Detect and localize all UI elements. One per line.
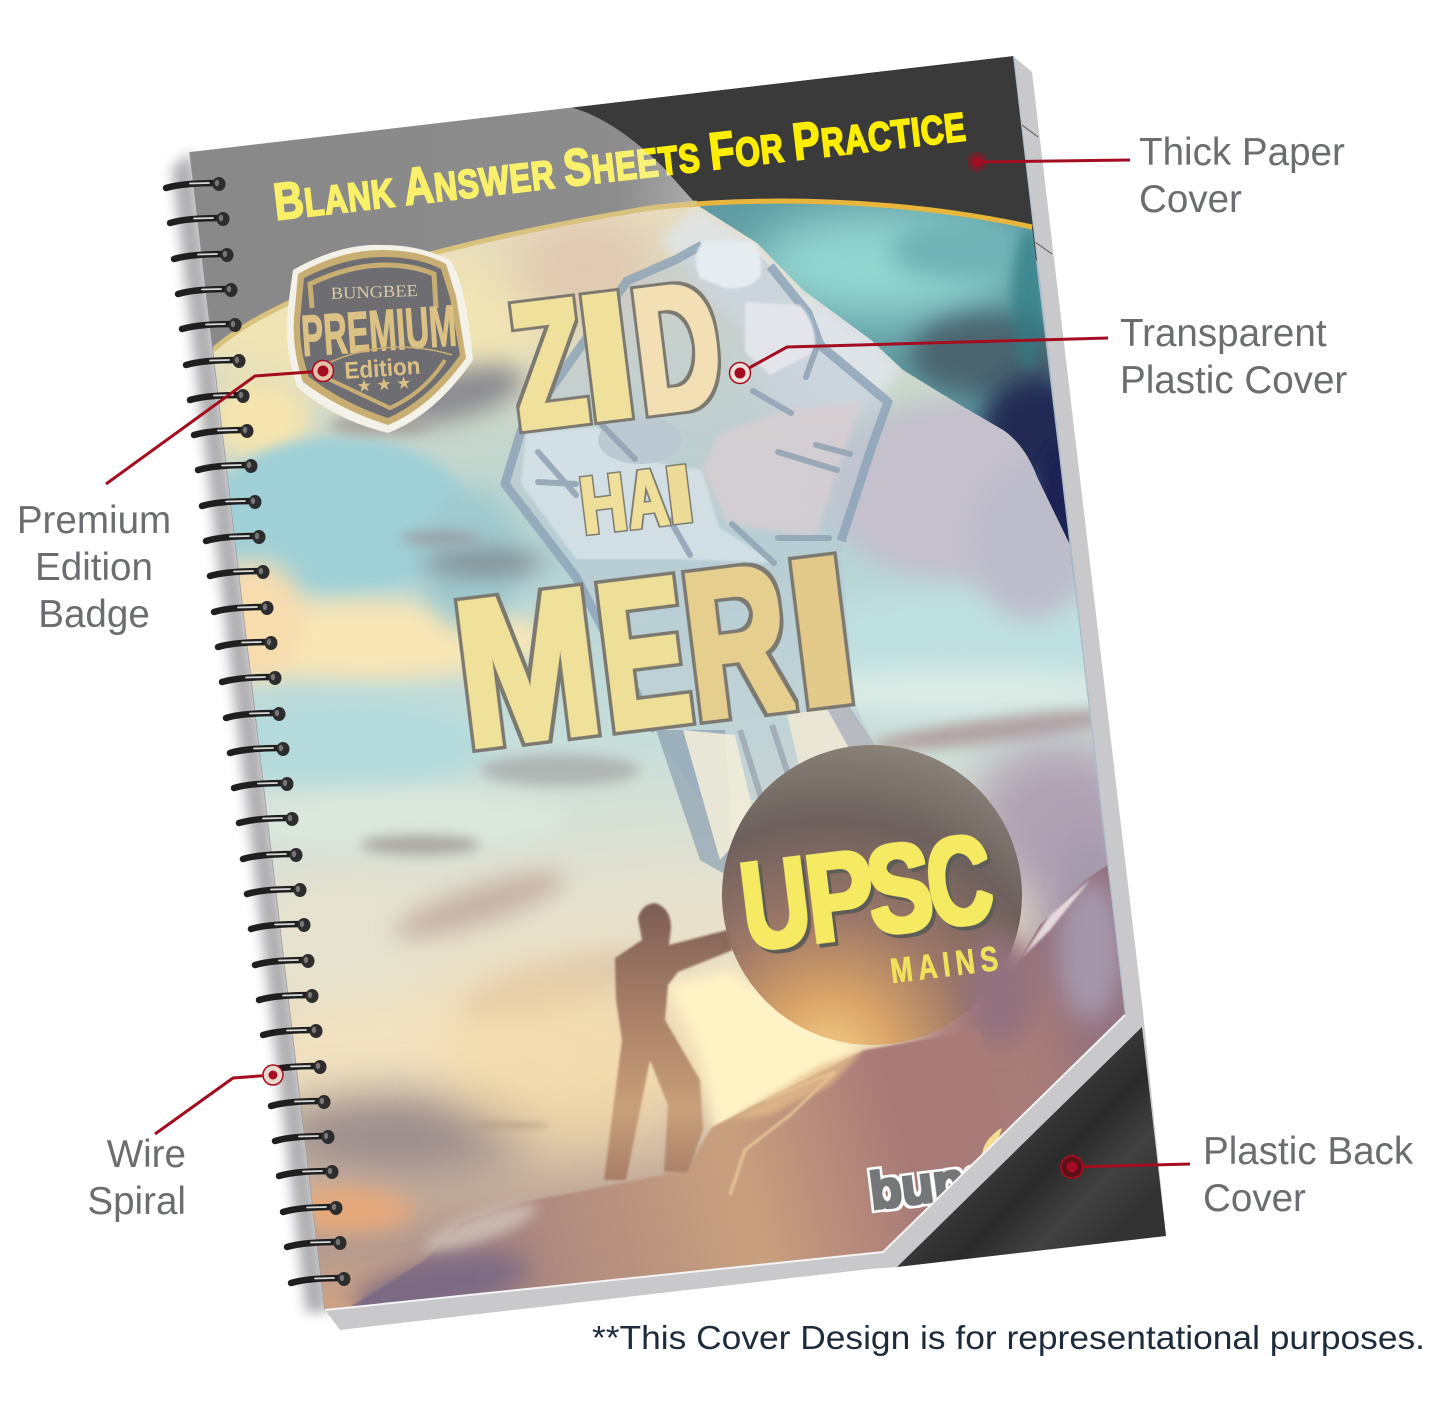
premium edition badge [287, 245, 473, 433]
headline: ZID: Z [501, 260, 595, 466]
badge word PREMIUM: PREMIUM [299, 293, 459, 369]
callout: plastic back cover: Cover [1203, 1177, 1306, 1220]
headline: UPSC: U [733, 832, 818, 977]
front cover [160, 56, 1155, 1330]
footnote: **This Cover Design is for representational purposes. [592, 1319, 1425, 1356]
callout: thick paper cover: Thick Paper [1139, 131, 1345, 174]
headline: HAI [575, 449, 700, 552]
callout: thick paper cover: Cover [1139, 178, 1242, 221]
headline: UPSC: S [860, 817, 940, 962]
headline: HAI: I [659, 449, 700, 542]
callout: wire spiral: Wire [107, 1133, 186, 1176]
plastic back cover [897, 1027, 1166, 1267]
callout: wire spiral [87, 1065, 283, 1223]
callout: thick paper cover [967, 131, 1345, 221]
callout: transparent plastic cover [730, 312, 1347, 402]
callout: wire spiral: Spiral [87, 1180, 186, 1223]
callout: premium edition badge [17, 360, 334, 636]
callout: plastic back cover [1061, 1130, 1414, 1220]
headline: ZID: I [566, 254, 648, 459]
title strip text: BLANK ANSWER SHEETS FOR PRACTICE [271, 94, 969, 232]
cover artwork: teal and navy corner [699, 204, 1075, 590]
cover artwork: sky [213, 206, 1125, 1309]
callout: premium edition badge: Badge [38, 593, 150, 636]
cover artwork: logo: bungbee [866, 1137, 1089, 1221]
callout: transparent plastic cover: Transparent [1120, 312, 1327, 355]
headline: UPSC: P [798, 824, 882, 969]
badge stars: ★★★ [356, 373, 412, 396]
callout: transparent plastic cover: Plastic Cover [1120, 359, 1347, 402]
cover artwork: sun glow [669, 970, 858, 1131]
book shadow along the spine [172, 152, 328, 1312]
headline: ZID [501, 244, 731, 466]
cover artwork: rock ledge [350, 1031, 980, 1306]
badge brand name: BUNGBEE [330, 281, 418, 303]
gold arc [650, 201, 1032, 227]
headline: ZID: D [623, 244, 731, 451]
corner cut white edge [325, 1015, 1125, 1310]
curled plastic tint [825, 400, 1095, 580]
headline: MERI [444, 513, 871, 792]
right sky [848, 602, 1083, 658]
headline: MERI: E [587, 534, 700, 774]
paper block edges [190, 56, 1166, 1330]
headline: MERI: R [674, 521, 801, 764]
headline: UPSC [733, 810, 999, 977]
callout: premium edition badge: Premium [17, 499, 171, 542]
headline: HAI: A [622, 452, 673, 546]
headline: MAINS: MAINS [888, 939, 1000, 991]
cover top band [190, 56, 1040, 400]
clouds [410, 350, 530, 438]
plastic sheen over the top band [190, 108, 694, 400]
badge word Edition: Edition [344, 353, 421, 385]
cover artwork: boulder [722, 745, 1022, 1045]
cover artwork: raised fist [505, 241, 888, 880]
headline: HAI: H [575, 457, 632, 552]
cover artwork: cliff and right side [1018, 865, 1125, 1088]
headline: MERI: M [444, 545, 611, 792]
cover artwork: man pushing boulder [604, 903, 733, 1180]
callout: premium edition badge: Edition [35, 546, 153, 589]
forearm [656, 730, 729, 874]
headline: MERI: I [773, 513, 871, 752]
headline: UPSC: C [919, 810, 999, 954]
callout: plastic back cover: Plastic Back [1203, 1130, 1414, 1173]
wire spiral binding [166, 177, 350, 1286]
